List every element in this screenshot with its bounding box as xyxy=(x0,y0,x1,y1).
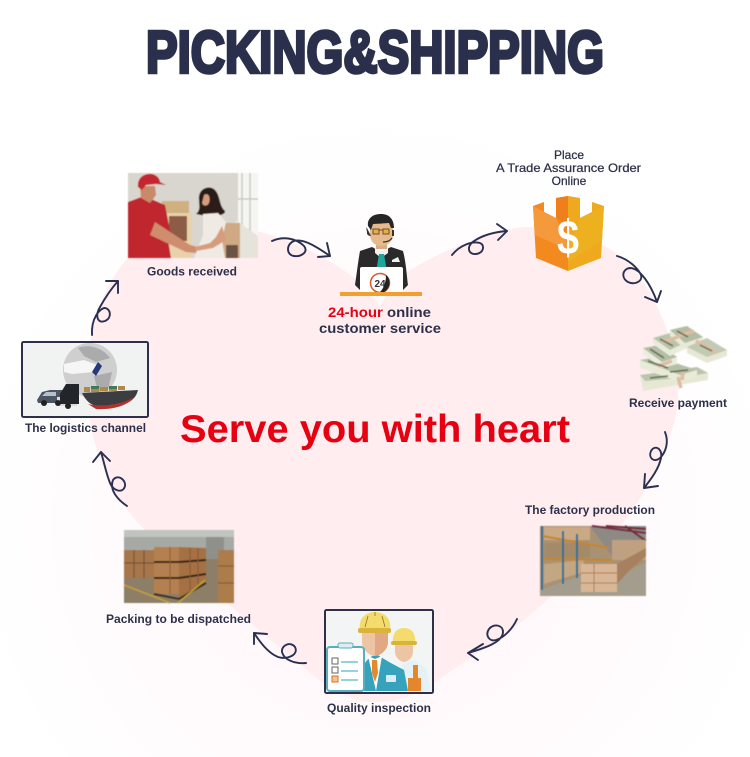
framed illustration: globe and vehicles xyxy=(22,342,148,417)
step: logistics channel xyxy=(22,342,148,435)
icon: trade assurance shield: $ xyxy=(557,212,579,265)
step: 24-hour customer service xyxy=(319,214,441,336)
label: Place xyxy=(554,148,584,162)
central slogan: Serve you with heart xyxy=(180,408,570,451)
photo: delivery handover xyxy=(128,173,258,258)
label: Packing to be dispatched xyxy=(106,612,251,626)
arrow: quality to packing xyxy=(254,633,306,663)
label: Online xyxy=(552,174,587,188)
title: PICKING&SHIPPING xyxy=(146,19,604,85)
icon: money stacks xyxy=(640,326,727,391)
step: quality inspection xyxy=(325,610,433,715)
photo: warehouse shelves xyxy=(540,526,646,596)
step: goods received xyxy=(128,173,258,278)
heart background xyxy=(87,226,678,702)
label second line: customer service xyxy=(319,320,441,336)
step: receive payment xyxy=(629,326,727,410)
step: place order xyxy=(496,148,641,271)
arrow: service to order xyxy=(452,224,507,255)
arrow: factory to quality xyxy=(468,619,517,660)
arrow: logistics to goods xyxy=(92,281,118,335)
icon: trade assurance shield xyxy=(533,196,604,271)
label: The factory production xyxy=(525,503,655,517)
framed illustration: inspectors xyxy=(325,610,433,693)
step: factory production xyxy=(525,503,655,596)
photo: packed pallets xyxy=(124,530,234,603)
label: Goods received xyxy=(147,264,237,278)
arrow: packing to logistics xyxy=(93,452,127,506)
arrow: order to payment xyxy=(617,256,661,302)
orange desk bar xyxy=(340,292,422,296)
arrow: payment to factory xyxy=(644,432,667,488)
icon: support agent: 24 xyxy=(374,279,386,290)
label: 24-hour online xyxy=(328,304,431,320)
label: The logistics channel xyxy=(25,421,146,435)
label: Quality inspection xyxy=(327,701,431,715)
label: Receive payment xyxy=(629,396,727,410)
label: A Trade Assurance Order xyxy=(496,161,641,175)
arrow: goods to service xyxy=(272,238,330,257)
label xyxy=(496,148,641,188)
step: packing to be dispatched xyxy=(106,530,251,626)
